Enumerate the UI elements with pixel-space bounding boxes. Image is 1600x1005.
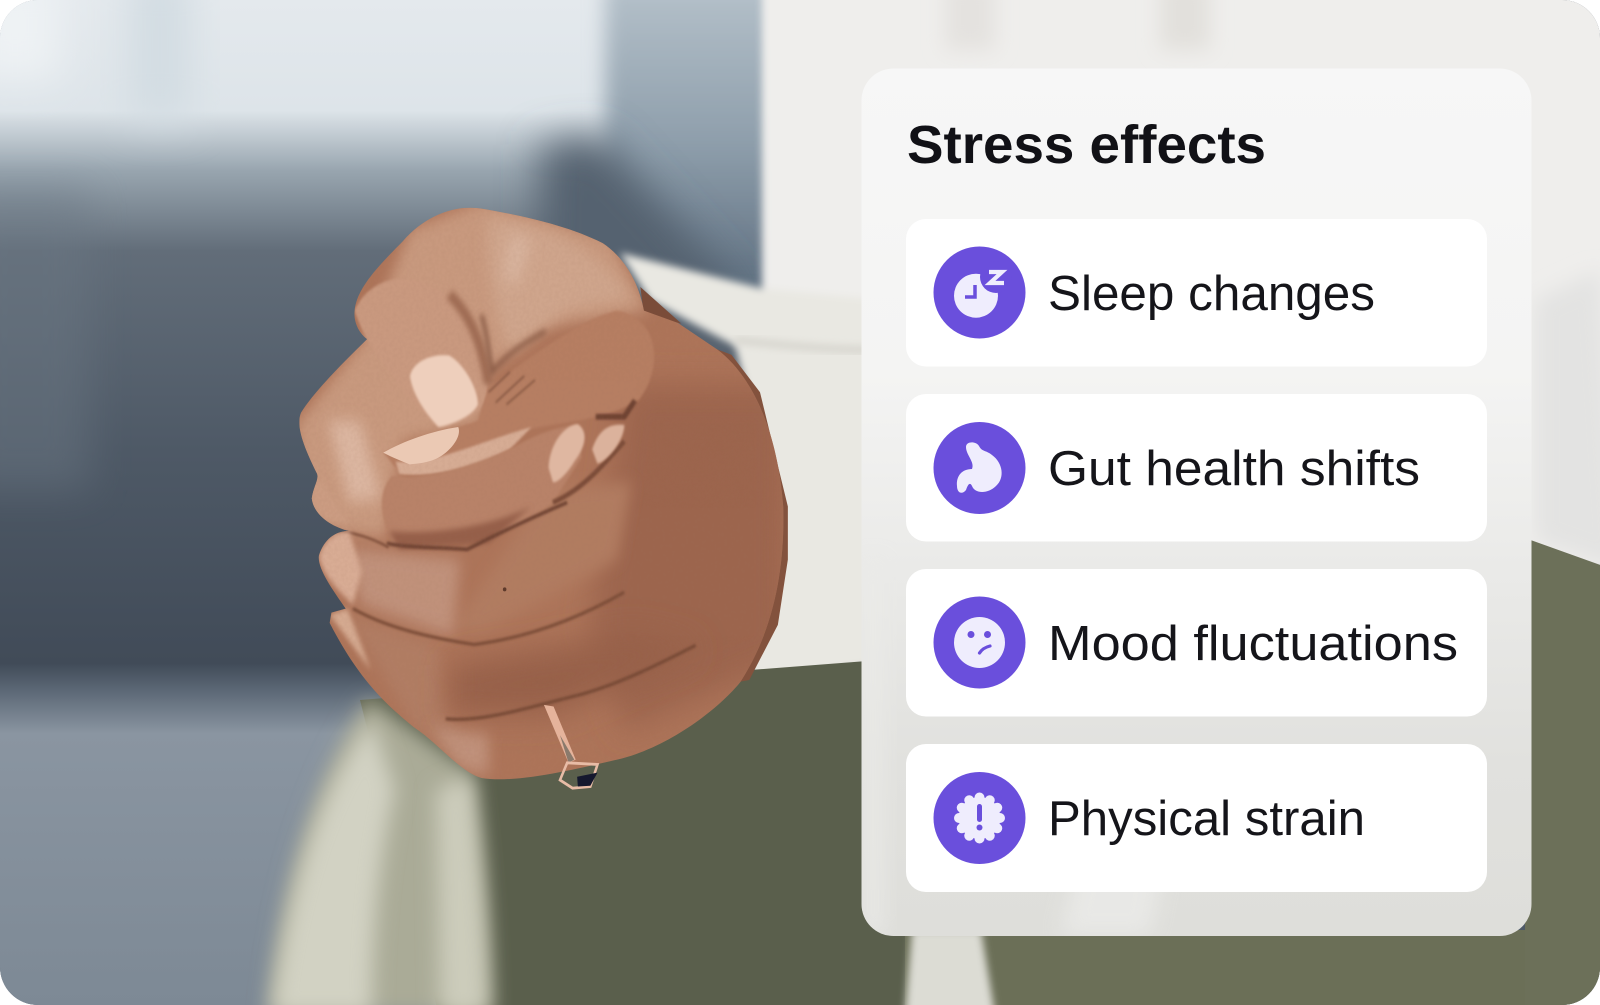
pale knee — [268, 698, 490, 1005]
second nail — [383, 427, 459, 464]
label: Mood fluctuations — [1048, 617, 1458, 671]
thumb nail — [410, 355, 478, 427]
thumb right-side shadow — [449, 294, 489, 384]
top finger under thumb — [383, 311, 654, 475]
label: Gut health shifts — [1048, 442, 1420, 496]
lower hand shading — [589, 384, 789, 731]
dark cuff shadow — [640, 287, 681, 324]
middle finger — [382, 427, 581, 532]
row: sleep changes — [906, 219, 1487, 366]
left fingertips — [319, 531, 362, 604]
row: physical strain — [906, 744, 1487, 892]
thumb — [354, 280, 487, 408]
label: Physical strain — [1048, 792, 1365, 846]
row: mood fluctuations — [906, 569, 1487, 716]
icon: sleep clock — [934, 246, 1026, 338]
sleeve — [620, 253, 880, 684]
upper hand, light — [296, 200, 649, 539]
white sweater — [762, 0, 1600, 570]
fold shadows — [481, 315, 546, 372]
icon: stomach — [934, 422, 1026, 514]
ring — [544, 705, 598, 788]
fingertip nails — [549, 424, 585, 482]
trousers olive — [360, 661, 905, 1005]
icon: alert badge — [934, 772, 1026, 864]
panel: stress effects — [861, 68, 1532, 936]
row: gut health shifts — [906, 394, 1487, 542]
icon: confused face — [934, 596, 1026, 688]
label: Sleep changes — [1048, 267, 1375, 321]
skin grain — [296, 204, 789, 784]
hands — [299, 208, 788, 790]
skin dots — [503, 587, 506, 591]
heading: Stress effects — [907, 115, 1266, 175]
